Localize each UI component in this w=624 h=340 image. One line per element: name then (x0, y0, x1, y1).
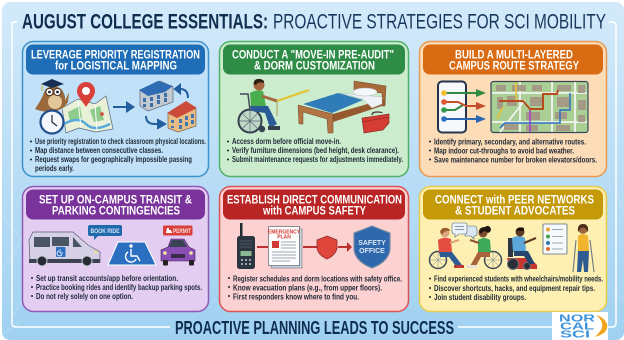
panel heading: transit and parking: SET UP ON-CAMPUS TRANSIT & (39, 192, 192, 206)
panel heading: move-in pre-audit (223, 44, 405, 74)
icon: connectors and small shield (257, 236, 352, 259)
panel heading: campus route strategy: CAMPUS ROUTE STRATEGY (449, 58, 579, 72)
bullet list: peer networks: Join student disability groups. (434, 292, 526, 302)
panel heading: campus route strategy (423, 44, 603, 74)
panel heading: transit and parking: PARKING CONTINGENCIES (52, 204, 180, 218)
callout: book ride: BOOK RIDE (90, 228, 120, 235)
logo: NorCal SCI: NOR (559, 314, 596, 324)
icon: accessible van (29, 232, 100, 266)
bullet list: move-in pre-audit: Verify furniture dimensions (bed height, desk clearance). (232, 145, 399, 155)
icon: map with pin (62, 82, 113, 133)
callout: book ride (88, 225, 122, 240)
logo: NorCal SCI: CAL (560, 322, 594, 332)
icon: safety office shield (354, 226, 390, 268)
arrow: map to buildings (113, 101, 135, 113)
panel heading: priority registration: LEVERAGE PRIORITY REGISTRATION (31, 48, 200, 62)
icon: campus map with routes (491, 82, 588, 132)
icon: emergency plan document (268, 226, 302, 268)
panel heading: peer networks: & STUDENT ADVOCATES (455, 204, 575, 218)
panel heading: priority registration: for LOGISTICAL MAPPING (55, 58, 177, 72)
panel: transit and parking (22, 186, 208, 312)
bullet list: campus safety (228, 274, 402, 302)
bullet list: priority registration: Request swaps for geographically impossible passing (35, 154, 192, 164)
icon: bed (298, 81, 386, 133)
panel: peer networks (420, 186, 606, 312)
bullet list: peer networks (429, 274, 603, 302)
panel: priority registration (22, 42, 208, 176)
footer tagline: PROACTIVE PLANNING LEADS TO SUCCESS (175, 318, 454, 338)
icon: emergency plan document: PLAN (277, 234, 291, 240)
panel heading: campus safety: with CAMPUS SAFETY (262, 204, 366, 218)
bullet list: transit and parking: Practice booking rides and identify backup parking spots. (36, 282, 202, 292)
panel: campus safety (220, 186, 408, 312)
bullet list: priority registration: periods early. (35, 163, 74, 173)
icon: phone with routes (438, 82, 486, 132)
icon: toolbox (362, 112, 389, 133)
panel heading: campus safety: ESTABLISH DIRECT COMMUNICATION (227, 192, 402, 206)
bullet list: transit and parking (31, 273, 202, 301)
bullet list: campus safety: First responders know where to find you. (233, 292, 359, 302)
icon: two-way radio (237, 223, 255, 269)
icon: blue roof building (139, 81, 173, 111)
bullet list: move-in pre-audit: Submit maintenance requests for adjustments immediately. (232, 154, 403, 164)
bullet list: campus route strategy: Map indoor cut-throughs to avoid bad weather. (434, 146, 574, 156)
panel heading: peer networks (423, 190, 603, 220)
icon: student in red shirt, wheelchair (430, 228, 464, 268)
panel heading: campus safety (223, 190, 405, 220)
panel heading: campus route strategy: BUILD A MULTI-LAYERED (455, 48, 573, 62)
bullet list: transit and parking: Do not rely solely on one option. (36, 291, 133, 301)
icon: student in green shirt, wheelchair (466, 226, 502, 268)
icon: accessible parking space (108, 242, 156, 265)
bullet list: move-in pre-audit (227, 136, 403, 164)
icon: safety office shield: OFFICE (359, 248, 385, 255)
icon: wheelchair user (238, 79, 280, 132)
bullet list: priority registration: Map distance between consecutive classes. (35, 145, 163, 155)
icon: emergency plan document: EMERGENCY (268, 230, 301, 236)
icon: tape measure (277, 90, 309, 116)
panel heading: transit and parking (26, 190, 205, 220)
icon: owl with cap (35, 79, 69, 112)
bullet list: priority registration (30, 136, 206, 173)
bullet list: move-in pre-audit: Access dorm before official move-in. (232, 136, 341, 146)
title (22, 10, 606, 34)
icon: speech bubbles (452, 223, 477, 239)
panel heading: move-in pre-audit: CONDUCT A "MOVE-IN PRE-AUDIT" (232, 48, 394, 62)
bullet list: campus safety: Register schedules and dorm locations with safety office. (233, 274, 402, 284)
icon: student in power wheelchair (507, 227, 537, 270)
panel: move-in pre-audit (220, 42, 408, 176)
panel heading: priority registration (26, 44, 205, 74)
bullet list: transit and parking: Set up transit accounts/app before orientation. (36, 273, 178, 283)
icon: checklist (543, 224, 567, 254)
arrow: cycle arrows (146, 85, 188, 128)
icon: permit sign: PERMIT (173, 228, 191, 235)
icon: safety office shield: SAFETY (358, 240, 386, 247)
logo: NorCal SCI (552, 312, 608, 340)
icon: standing student with crutches (573, 224, 594, 272)
icon: purple car (161, 239, 195, 266)
icon: red roof building (167, 101, 197, 132)
bullet list: campus safety: Know evacuation plans (e.g., from upper floors). (233, 282, 382, 292)
title: AUGUST COLLEGE ESSENTIALS: (22, 10, 268, 34)
bullet list: campus route strategy (429, 136, 597, 164)
panel heading: move-in pre-audit: & DORM CUSTOMIZATION (254, 58, 375, 72)
panel: campus route strategy (420, 42, 606, 176)
bullet list: priority registration: Use priority registration to check classroom physical locations. (35, 136, 206, 146)
icon: permit sign (163, 226, 192, 236)
icon: clock (40, 110, 64, 134)
